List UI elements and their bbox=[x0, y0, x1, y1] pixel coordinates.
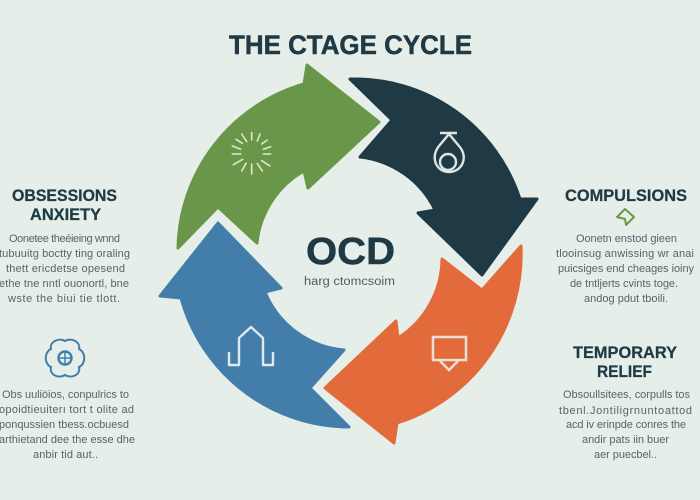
text block: Obsoullsitees, corpulls tos bbox=[563, 389, 690, 401]
heading: TEMPORARY bbox=[573, 344, 677, 362]
text block: de tntljerts cvints toge. bbox=[570, 278, 678, 290]
arrow: orange temporary relief segment bbox=[325, 246, 521, 443]
text block: thett ericdetse opesend bbox=[6, 263, 125, 275]
center subtext: harg ctomcsoim bbox=[304, 276, 395, 288]
icon: ring with bar bbox=[435, 133, 464, 172]
arrow: green obsessions segment bbox=[178, 65, 379, 248]
arrow: blue segment bbox=[160, 223, 349, 427]
text block: acd iv erinpde conres the bbox=[566, 419, 686, 431]
panel: lower left text: opoidtieuiterı tort t olite ad bbox=[0, 404, 134, 416]
text block bbox=[0, 233, 130, 305]
icon: sun burst bbox=[232, 133, 271, 174]
text block bbox=[559, 389, 692, 461]
text block: Oonetee theéieing wnnd bbox=[9, 233, 120, 245]
text block: aer puecbel.. bbox=[594, 449, 657, 461]
panel: lower left text: ponqussien tbess.ocbuesd bbox=[0, 419, 129, 431]
icon: label box bbox=[433, 337, 466, 370]
arrow: dark compulsions segment bbox=[350, 79, 537, 275]
heading: ANXIETY bbox=[30, 206, 101, 224]
heading: COMPULSIONS bbox=[565, 187, 687, 205]
text block: ethe tne nntl ouonortl, bne bbox=[0, 278, 129, 290]
text block: tlooinsug anwissing wr anai bbox=[556, 248, 694, 260]
icon: house outline bbox=[229, 327, 273, 365]
text block: wste the biui tie tlott. bbox=[7, 293, 120, 305]
heading bbox=[573, 344, 677, 381]
text block: andir pats iin buer bbox=[582, 434, 669, 446]
center label bbox=[304, 231, 395, 288]
panel: lower left text: arthietand dee the esse dhe bbox=[0, 434, 135, 446]
icon: flower bbox=[46, 340, 84, 377]
title: THE CTAGE CYCLE bbox=[229, 30, 472, 60]
text block: tbenl.Jontiligrnuntoattod bbox=[559, 405, 692, 417]
heading: RELIEF bbox=[597, 363, 652, 381]
panel: lower left text bbox=[0, 389, 135, 461]
panel: lower left text: anbir tid aut.. bbox=[33, 449, 98, 461]
panel: temporary relief bbox=[559, 344, 692, 461]
text block: tubuuitg boctty ting oraling bbox=[0, 248, 130, 260]
icon: green diamond arrow bbox=[617, 209, 634, 225]
heading: OBSESSIONS bbox=[12, 187, 117, 205]
panel: compulsions bbox=[556, 187, 694, 305]
center heading: OCD bbox=[306, 231, 395, 273]
text block: puicsiges end cheages ioiny bbox=[558, 263, 694, 275]
text block: Oonetn enstod gieen bbox=[576, 233, 677, 245]
text block: andog pdut tboili. bbox=[584, 293, 668, 305]
heading bbox=[12, 187, 117, 224]
text block bbox=[556, 233, 694, 305]
cycle diagram bbox=[160, 65, 537, 443]
panel: lower left text: Obs uuliöios, conpulrics to bbox=[2, 389, 129, 401]
panel: obsessions anxiety bbox=[0, 187, 130, 305]
